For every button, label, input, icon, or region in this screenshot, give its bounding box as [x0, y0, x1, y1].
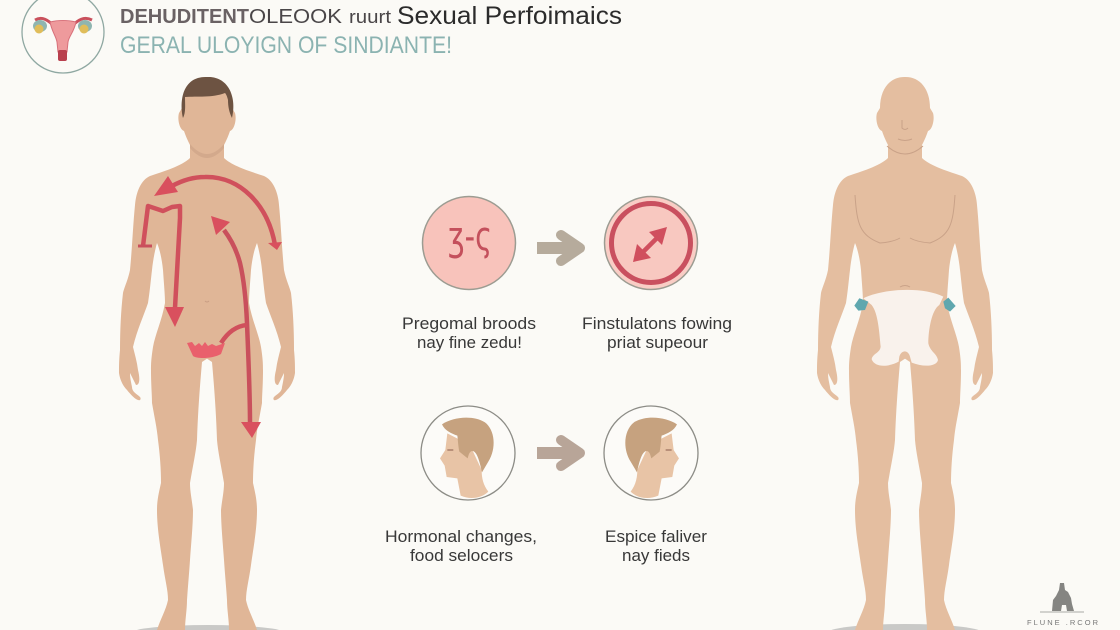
step: pink circle glyph: ӡ-ς [448, 214, 492, 260]
label: finstulatons fowing: priat supeour [607, 333, 708, 352]
title: DEHUDITENT [120, 6, 249, 28]
navel [205, 301, 209, 302]
title: ruurt [349, 7, 391, 27]
groin branch [187, 325, 247, 358]
ground shadow [131, 625, 285, 630]
arrow: step three to four [537, 440, 580, 466]
subtitle: GERAL ULOYIGN OF SINDIANTE! [120, 32, 452, 59]
label: pregomal broods: nay fine zedu! [417, 333, 522, 352]
teal tab right [943, 298, 956, 312]
arrow: shoulder arc [154, 176, 282, 250]
label: espice faliver: Espice faliver [605, 527, 707, 546]
face and chest lines [855, 120, 955, 287]
title [120, 2, 622, 30]
label: hormonal changes [385, 527, 537, 565]
logo bottom right: FLUNE .RCOR [1027, 618, 1099, 627]
title: OLEOOK [249, 6, 343, 28]
label: finstulatons fowing: Finstulatons fowing [582, 314, 732, 333]
step: pink circle glyph [422, 196, 516, 290]
brief garment on right figure [854, 290, 956, 366]
body silhouette [817, 77, 993, 630]
label: pregomal broods: Pregomal broods [402, 314, 536, 333]
label: finstulatons fowing [582, 314, 732, 352]
title: Sexual Perfoimaics [397, 2, 622, 30]
label: espice faliver [605, 527, 707, 565]
body silhouette [119, 77, 295, 630]
step: ring circle with double arrow [604, 196, 698, 290]
arrow: bracket to torso [138, 206, 184, 327]
label: hormonal changes: Hormonal changes, [385, 527, 537, 546]
red arrows on left figure [138, 176, 282, 438]
label: espice faliver: nay fieds [622, 546, 690, 565]
arrow: long side curve [211, 216, 261, 438]
right body figure [817, 77, 993, 630]
neck shadow [190, 144, 224, 158]
arrow: step one to two [537, 235, 580, 261]
step: profile facing right [604, 406, 698, 500]
label: hormonal changes: food selocers [410, 546, 513, 565]
step: profile facing left [421, 406, 515, 500]
left body figure [119, 77, 295, 630]
logo bottom right [1027, 583, 1099, 627]
teal tab left [854, 298, 868, 311]
label: pregomal broods [402, 314, 536, 352]
icon: uterus badge [22, 0, 104, 73]
ground shadow [827, 624, 983, 630]
hair [182, 77, 233, 118]
